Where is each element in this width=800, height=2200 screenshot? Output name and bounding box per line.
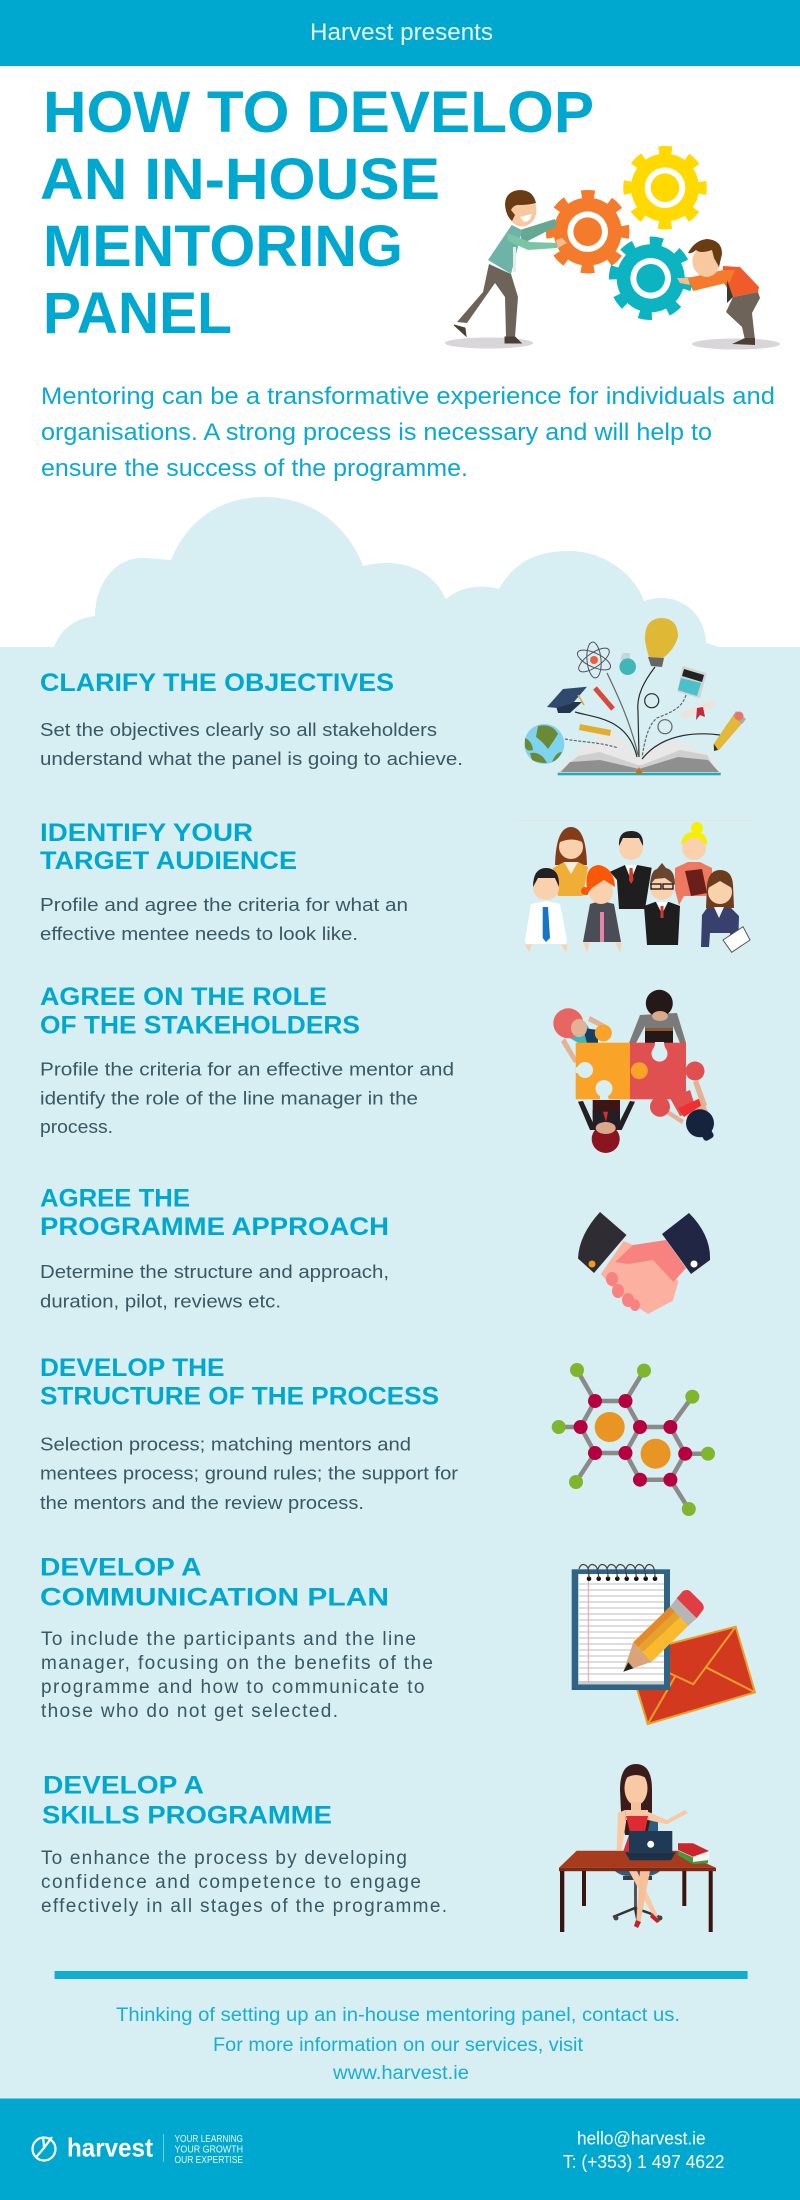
- atom: [575, 641, 613, 679]
- logo: [32, 2132, 243, 2166]
- step 6: develop a communication plan: those who do not get selected.: [41, 1701, 338, 1722]
- man in white shirt: [525, 868, 567, 951]
- icon: leaf in circle: [32, 2137, 56, 2160]
- contact details: [563, 2128, 724, 2172]
- icon: notebook, pencil and envelope: [572, 1564, 755, 1724]
- woman: [617, 1764, 688, 1928]
- woman with clipboard: [701, 870, 750, 952]
- books: [678, 1843, 709, 1864]
- title: PANEL: [43, 281, 232, 346]
- step 3: agree on the role of the stakeholders: Profile the criteria for an effective mentor and: [40, 1058, 454, 1080]
- step 6: develop a communication plan: To include the participants and the line: [41, 1629, 416, 1650]
- step 2: identify your target audience: Profile and agree the criteria for what an: [40, 894, 408, 915]
- closing call to action: [116, 2005, 680, 2084]
- chair: [613, 1820, 662, 1923]
- icon: people joining puzzle pieces: [553, 990, 715, 1153]
- figure: left man: [454, 190, 567, 343]
- ruler: [579, 724, 611, 736]
- closing call to action: www.harvest.ie: [332, 2063, 469, 2084]
- red pencil: [595, 688, 613, 709]
- step 6: develop a communication plan: DEVELOP A: [40, 1554, 202, 1582]
- step 2: identify your target audience: IDENTIFY YOUR: [40, 819, 253, 847]
- flask: [619, 653, 636, 675]
- title: [40, 80, 594, 346]
- icon: yellow gear: [628, 150, 702, 225]
- step 7: develop a skills programme: To enhance the process by developing: [41, 1848, 407, 1869]
- icon: group of people: [515, 820, 753, 952]
- figure: right man: [677, 239, 760, 345]
- step 1: clarify the objectives: understand what the panel is going to achieve.: [40, 748, 463, 769]
- step 2: identify your target audience: effective mentee needs to look like.: [40, 923, 358, 944]
- closing call to action: For more information on our services, visit: [213, 2035, 584, 2056]
- title: MENTORING: [43, 214, 403, 279]
- footer band: [0, 2098, 800, 2200]
- step 7: develop a skills programme: DEVELOP A: [43, 1772, 204, 1800]
- icon: molecule network: [552, 1363, 715, 1516]
- title: AN IN-HOUSE: [40, 147, 440, 212]
- header band: Harvest presents: [310, 19, 493, 46]
- step 1: clarify the objectives: Set the objectives clearly so all stakeholders: [40, 719, 437, 740]
- step 3: agree on the role of the stakeholders: [40, 983, 454, 1137]
- step 6: develop a communication plan: [40, 1554, 433, 1722]
- step 7: develop a skills programme: effectively in all stages of the programme.: [41, 1896, 447, 1917]
- step 5: develop the structure of the process: Selection process; matching mentors and: [40, 1434, 411, 1454]
- envelope: [627, 1627, 755, 1724]
- step 7: develop a skills programme: SKILLS PROGRAMME: [42, 1802, 332, 1830]
- icon: woman at desk with laptop: [559, 1764, 716, 1932]
- step 7: develop a skills programme: [41, 1772, 447, 1917]
- background cloud and pale panel: [0, 497, 800, 2100]
- step 3: agree on the role of the stakeholders: AGREE ON THE ROLE: [40, 983, 327, 1011]
- woman with orange hair: [581, 865, 621, 951]
- icon: orange gear: [550, 194, 625, 269]
- big pencil: [713, 711, 746, 751]
- step 6: develop a communication plan: programme and how to communicate to: [41, 1677, 424, 1698]
- icon: teal gear: [608, 236, 693, 321]
- top left person: [553, 1008, 608, 1063]
- step 4: agree the programme approach: AGREE THE: [40, 1184, 190, 1212]
- title: HOW TO DEVELOP: [43, 80, 594, 145]
- step 3: agree on the role of the stakeholders: identify the role of the line manager in the: [40, 1088, 418, 1108]
- diploma: [684, 704, 712, 720]
- step 3: agree on the role of the stakeholders: process.: [40, 1116, 113, 1137]
- step 4: agree the programme approach: duration, pilot, reviews etc.: [40, 1290, 281, 1312]
- puzzle tab: orange top: [595, 1024, 612, 1042]
- blonde woman: [675, 822, 712, 905]
- back man: [610, 831, 652, 909]
- red puzzle piece: [630, 1042, 704, 1117]
- closing call to action: Thinking of setting up an in-house mentoring panel, contact us.: [116, 2005, 680, 2026]
- step 5: develop the structure of the process: STRUCTURE OF THE PROCESS: [40, 1382, 439, 1410]
- bottom right person: [660, 1080, 715, 1142]
- step 5: develop the structure of the process: DEVELOP THE: [40, 1354, 224, 1382]
- logo: YOUR LEARNING: [174, 2133, 243, 2145]
- icon: handshake: [578, 1212, 710, 1314]
- calculator: [677, 666, 707, 698]
- step 3: agree on the role of the stakeholders: OF THE STAKEHOLDERS: [40, 1012, 360, 1040]
- step 5: develop the structure of the process: the mentors and the review process.: [40, 1492, 364, 1513]
- notebook: [572, 1564, 670, 1690]
- globe: [524, 724, 564, 764]
- top right person: [629, 990, 686, 1043]
- step 1: clarify the objectives: [40, 669, 463, 769]
- graduation cap: [547, 687, 587, 713]
- step 1: clarify the objectives: CLARIFY THE OBJECTIVES: [40, 669, 394, 697]
- logo: OUR EXPERTISE: [174, 2154, 243, 2166]
- step 5: develop the structure of the process: [40, 1354, 458, 1513]
- divider bar: [55, 1971, 748, 1979]
- pencil: [623, 1590, 704, 1672]
- illustration: two people turning gears: [445, 150, 780, 350]
- step 5: develop the structure of the process: mentees process; ground rules; the support for: [40, 1462, 458, 1484]
- icon: open book with ideas: [524, 618, 746, 775]
- step 6: develop a communication plan: COMMUNICATION PLAN: [40, 1584, 389, 1612]
- step 7: develop a skills programme: confidence and competence to engage: [41, 1872, 421, 1893]
- logo: YOUR GROWTH: [174, 2144, 243, 2156]
- orange puzzle piece: [576, 1043, 630, 1100]
- laptop: [625, 1831, 676, 1860]
- bottom left person: [578, 1100, 635, 1153]
- step 4: agree the programme approach: [40, 1184, 389, 1312]
- step 4: agree the programme approach: Determine the structure and approach,: [40, 1261, 389, 1282]
- logo: harvest: [67, 2132, 153, 2162]
- intro text: organisations. A strong process is necessary and will help to: [41, 419, 712, 446]
- desk: [559, 1851, 716, 1932]
- intro text: ensure the success of the programme.: [41, 455, 468, 482]
- back woman: [553, 827, 588, 896]
- step 2: identify your target audience: TARGET AUDIENCE: [40, 847, 297, 875]
- step 2: identify your target audience: [40, 819, 408, 944]
- man with glasses: [644, 863, 680, 945]
- header band: [0, 0, 800, 66]
- intro text: [41, 383, 775, 482]
- step 4: agree the programme approach: PROGRAMME APPROACH: [40, 1213, 389, 1241]
- step 6: develop a communication plan: manager, focusing on the benefits of the: [41, 1653, 433, 1674]
- lightbulb: [645, 618, 678, 667]
- contact details: T: (+353) 1 497 4622: [563, 2152, 724, 2172]
- intro text: Mentoring can be a transformative experience for individuals and: [41, 383, 775, 410]
- contact details: hello@harvest.ie: [577, 2128, 706, 2148]
